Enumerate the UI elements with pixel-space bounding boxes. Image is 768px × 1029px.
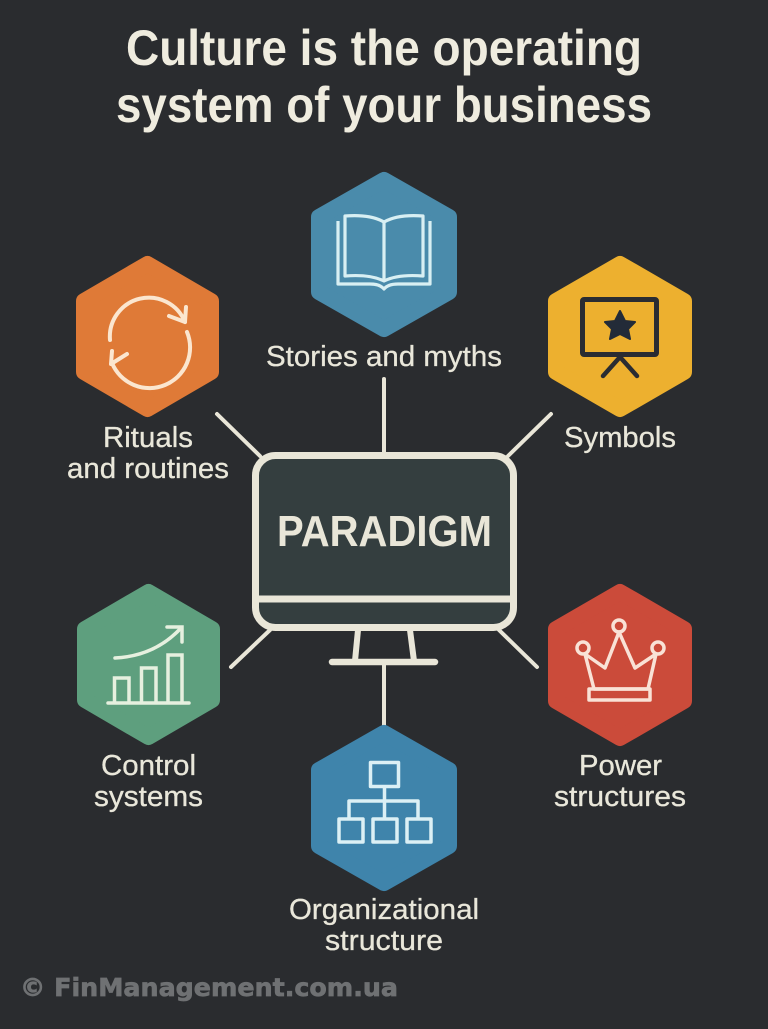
label: systems [94, 781, 203, 813]
icon: org chart [339, 762, 431, 842]
node: organizational structure [289, 733, 479, 957]
label: structures [554, 781, 686, 813]
label: Power [579, 750, 662, 782]
title: system of your business [116, 77, 652, 133]
icon: crown [577, 620, 664, 700]
label [289, 894, 479, 957]
watermark: © FinManagement.com.ua [20, 973, 398, 1002]
icon: refresh cycle [110, 298, 190, 388]
icon: open book [338, 216, 430, 289]
icon: presentation board with star [582, 300, 656, 376]
monitor label: PARADIGM [277, 507, 492, 556]
node: rituals and routines [67, 264, 229, 485]
node: power structures [554, 592, 686, 813]
title: Culture is the operating [126, 20, 642, 76]
label [67, 422, 229, 485]
label: and routines [67, 453, 229, 485]
label [94, 750, 203, 813]
icon: growth chart [108, 627, 189, 703]
label: Symbols [564, 422, 676, 454]
node: control systems [85, 592, 212, 813]
monitor: paradigm [256, 456, 514, 662]
label [554, 750, 686, 813]
node: symbols [556, 264, 684, 454]
title [116, 20, 652, 133]
label: Rituals [103, 422, 193, 454]
label: Organizational [289, 894, 479, 926]
connector lines [217, 379, 551, 726]
label: Stories and myths [266, 341, 502, 373]
node: stories and myths [266, 180, 502, 373]
label: structure [325, 925, 443, 957]
label: Control [101, 750, 196, 782]
